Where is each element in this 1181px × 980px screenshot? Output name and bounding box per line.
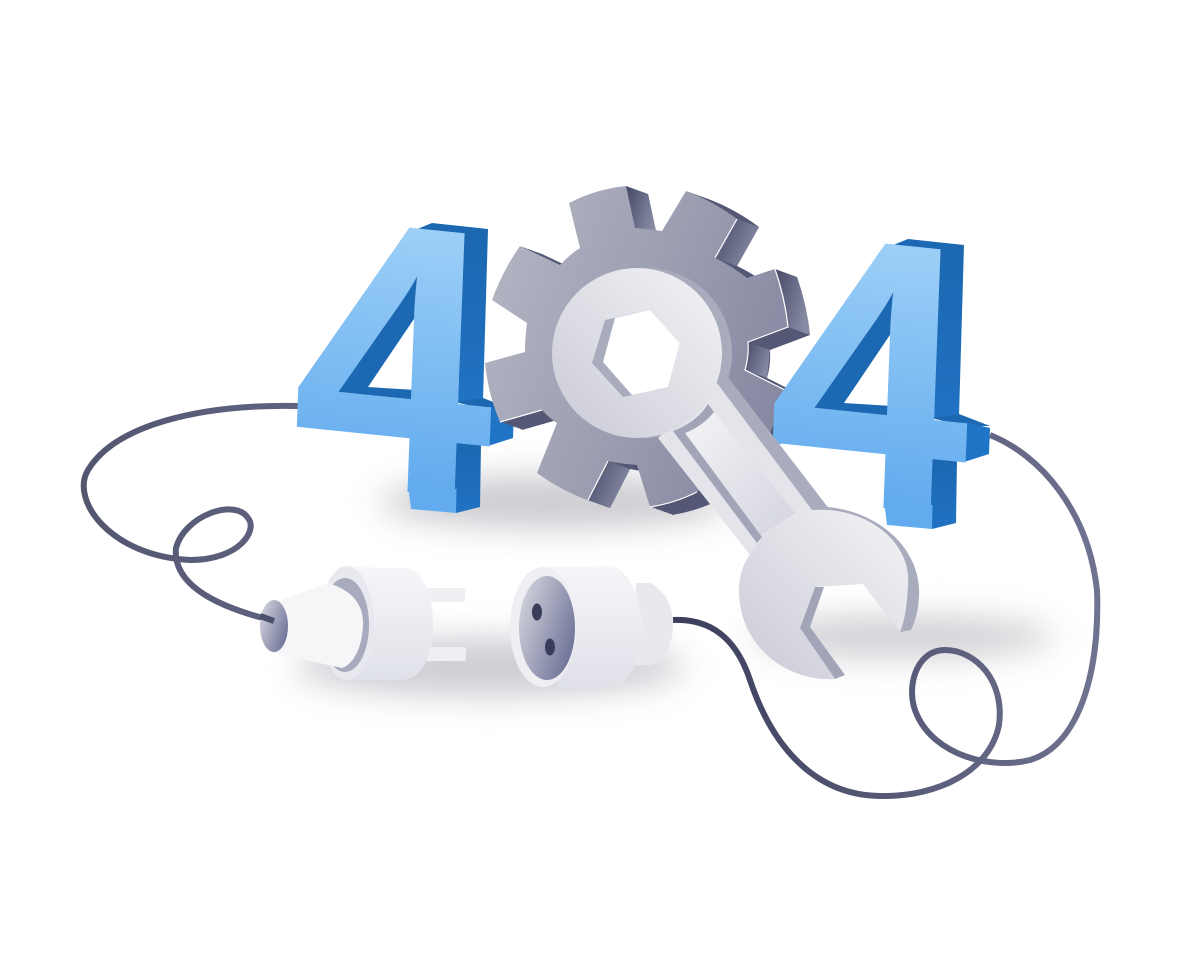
- icon: gear: [485, 186, 810, 515]
- plug cone: [270, 583, 363, 668]
- socket rear cylinder: [636, 583, 673, 665]
- plug rim: [320, 566, 374, 680]
- open jaw head: [739, 510, 908, 679]
- number 4 front face: 4: [286, 134, 505, 582]
- plug tip: [260, 600, 288, 652]
- icon: socket: [510, 566, 673, 688]
- number 4 front face: 4: [762, 150, 981, 598]
- shadow: under wrench: [751, 615, 1055, 659]
- icon: plug: [260, 566, 466, 680]
- stem base of right 4: [884, 501, 932, 529]
- digit: left 4: [286, 134, 514, 582]
- socket hole top: [532, 604, 542, 620]
- open jaw inner side: [800, 587, 845, 679]
- plug body: [345, 567, 433, 680]
- wrench side faces: [562, 268, 919, 632]
- extruded sides of left 4: [330, 223, 514, 513]
- plug inner ring: [321, 578, 369, 672]
- wrench handle: [658, 383, 812, 555]
- socket face: [519, 576, 575, 680]
- socket rim: [510, 567, 576, 687]
- gear edge highlights: [500, 219, 788, 507]
- socket body: [547, 566, 642, 688]
- wrench ring head: [552, 268, 722, 438]
- cable stub into plug tip: [260, 616, 274, 621]
- plug pins: [425, 588, 466, 661]
- digit: right 4: [762, 150, 990, 598]
- shadow: under plugs: [295, 638, 685, 696]
- shadow: under gear: [380, 476, 730, 528]
- icon: wrench: [552, 268, 919, 679]
- cable: right: [673, 435, 1097, 796]
- handle recess: [673, 404, 795, 543]
- extruded sides of right 4: [806, 239, 990, 529]
- gear front face: [485, 186, 788, 507]
- gear tooth side shading: [588, 186, 810, 508]
- hexagon opening: [592, 310, 680, 397]
- socket hole bottom: [545, 638, 555, 656]
- cable: left: [84, 406, 298, 621]
- gear extrusion: [487, 187, 810, 515]
- stem base of left 4: [408, 485, 456, 513]
